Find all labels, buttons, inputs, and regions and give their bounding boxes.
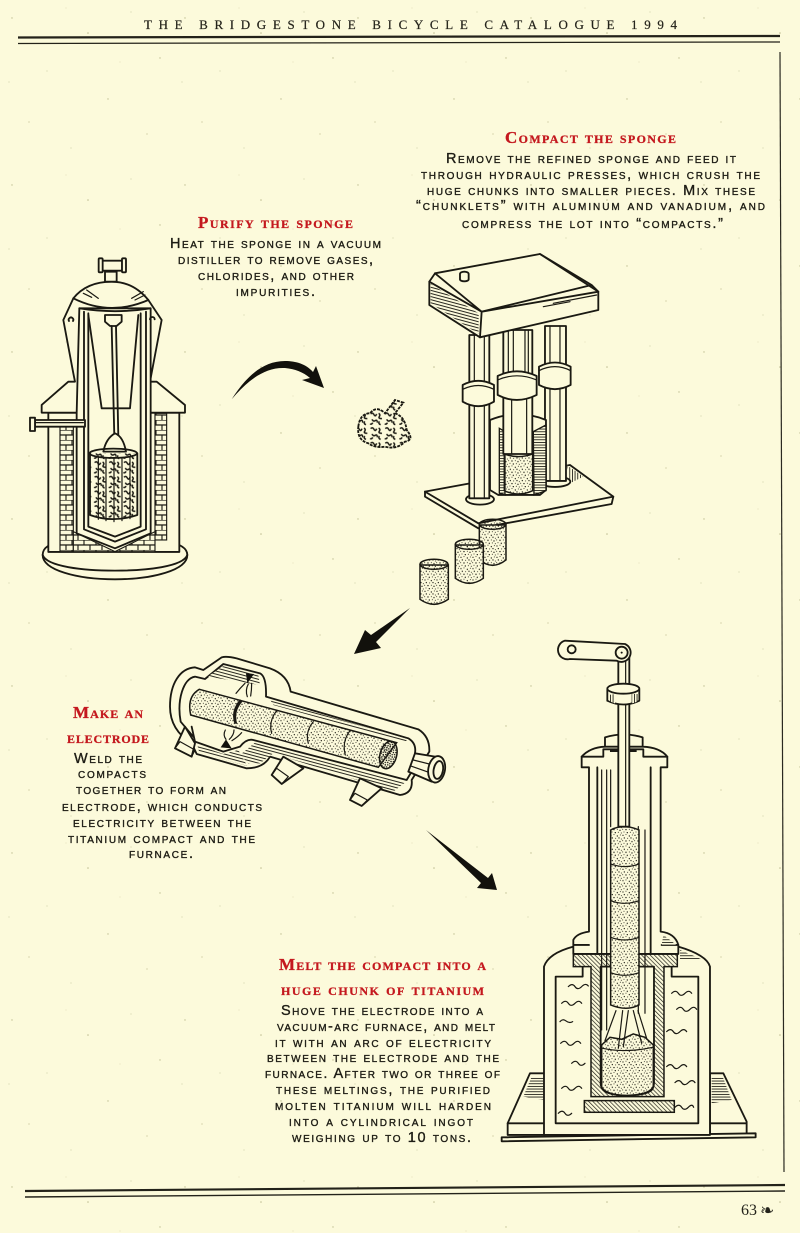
- ornament: ❧: [760, 1201, 774, 1221]
- body text: make an electrode: electrode, which conducts: [62, 799, 262, 815]
- lift rod: [618, 656, 629, 827]
- water tank: [544, 947, 710, 1135]
- heading: make an electrode: [67, 703, 149, 747]
- step text: compact the sponge: [416, 128, 765, 232]
- curved arrow: [232, 361, 324, 399]
- heading: melt the compact: [279, 955, 486, 999]
- body text: make an electrode: titanium compact and the: [68, 831, 255, 847]
- body text: make an electrode: compacts: [78, 766, 146, 782]
- rod and holder: [105, 315, 122, 326]
- upper chamber: [573, 734, 703, 1030]
- electrode column: [611, 827, 639, 1008]
- body text: melt the compact: [265, 1003, 500, 1146]
- crank arm: [558, 641, 631, 662]
- hatched bands: [197, 666, 408, 792]
- heading: make an electrode: electrode: [67, 728, 149, 747]
- body text: melt the compact: it with an arc of electricity: [275, 1035, 491, 1051]
- water waves: [558, 984, 697, 1115]
- compact cylinders: [420, 519, 506, 604]
- electric arcs: [221, 673, 254, 748]
- body text: melt the compact: molten titanium will harden: [275, 1098, 491, 1114]
- press top block: [429, 254, 598, 337]
- heading: melt the compact: Melt the compact into a: [279, 955, 486, 974]
- straight arrow to melting furnace: [426, 830, 497, 890]
- body text: compact the sponge: Remove the refined sponge and feed it: [446, 151, 736, 167]
- top spool: [99, 258, 126, 282]
- body text: compact the sponge: compress the lot into “compacts.”: [462, 216, 723, 232]
- bolt: [30, 418, 85, 431]
- body text: melt the compact: into a cylindrical ingot: [289, 1114, 473, 1130]
- right column: [539, 326, 571, 487]
- body text: melt the compact: vacuum-arc furnace, and melt: [277, 1019, 495, 1035]
- middle column: [498, 330, 537, 494]
- sponge basket: [90, 433, 137, 522]
- body text: make an electrode: together to form an: [76, 782, 226, 798]
- rod collar: [607, 684, 639, 704]
- step text: melt the compact: [265, 955, 500, 1146]
- page number: 63: [741, 1202, 757, 1219]
- illustration: hydraulic press: [420, 254, 613, 604]
- body text: purify the sponge: chlorides, and other: [198, 268, 354, 284]
- base disc: [43, 542, 187, 579]
- heading: make an electrode: Make an: [73, 703, 143, 722]
- page number: [741, 1201, 774, 1221]
- illustration: vacuum-arc furnace: [502, 641, 756, 1141]
- body text: make an electrode: [62, 751, 262, 862]
- top knob: [460, 272, 469, 281]
- press mold sleeve: [490, 414, 546, 495]
- step text: make an electrode: [62, 703, 262, 862]
- welded electrode: [190, 689, 400, 771]
- left column: [463, 335, 494, 505]
- illustration: electrode in welding furnace: [170, 657, 447, 806]
- furnace inner liner: [179, 664, 415, 753]
- illustration: titanium sponge pile: [358, 400, 410, 448]
- body text: purify the sponge: Heat the sponge in a vacuum: [170, 236, 381, 252]
- cone: [88, 315, 138, 408]
- body text: compact the sponge: through hydraulic presses, which crush the: [421, 167, 760, 183]
- body text: make an electrode: electricity between the: [73, 815, 251, 831]
- eyelets: [69, 317, 155, 321]
- side supports: [508, 1073, 545, 1135]
- body text: make an electrode: Weld the: [74, 751, 142, 767]
- feet: [175, 727, 195, 757]
- base plate: [425, 465, 613, 528]
- body text: compact the sponge: [416, 151, 765, 232]
- base plate: [502, 1133, 756, 1141]
- body text: melt the compact: these meltings, the purified: [276, 1082, 490, 1098]
- body text: compact the sponge: huge chunks into smaller pieces. Mix these: [427, 183, 755, 199]
- body text: purify the sponge: impurities.: [236, 284, 315, 300]
- illustration: vacuum distiller: [30, 258, 187, 579]
- furnace nozzle: [408, 753, 447, 784]
- hood and dome: [42, 282, 185, 413]
- body text: melt the compact: weighing up to 10 tons.: [292, 1130, 471, 1146]
- brick walls: [48, 413, 179, 552]
- furnace shell: [170, 657, 429, 795]
- body text: make an electrode: furnace.: [129, 846, 193, 862]
- hatched crucible: [573, 954, 677, 1112]
- inner vessel: [77, 308, 151, 548]
- body text: melt the compact: between the electrode and the: [267, 1050, 499, 1066]
- body text: melt the compact: Shove the electrode into a: [281, 1003, 483, 1019]
- melted ingot: [602, 1011, 653, 1096]
- body text: purify the sponge: [170, 236, 381, 300]
- body text: purify the sponge: distiller to remove gases,: [178, 252, 373, 268]
- body text: compact the sponge: “chunklets” with aluminum and vanadium, and: [416, 198, 765, 214]
- running header: THE BRIDGESTONE BICYCLE CATALOGUE 1994: [144, 17, 677, 32]
- step text: purify the sponge: [170, 213, 381, 300]
- straight arrow to furnace electrode: [354, 608, 410, 654]
- body text: melt the compact: furnace. After two or three of: [265, 1066, 500, 1082]
- heading: purify the sponge: Purify the sponge: [198, 213, 353, 232]
- heading: melt the compact: huge chunk of titanium: [281, 980, 484, 999]
- heading: compact the sponge: Compact the sponge: [505, 128, 676, 147]
